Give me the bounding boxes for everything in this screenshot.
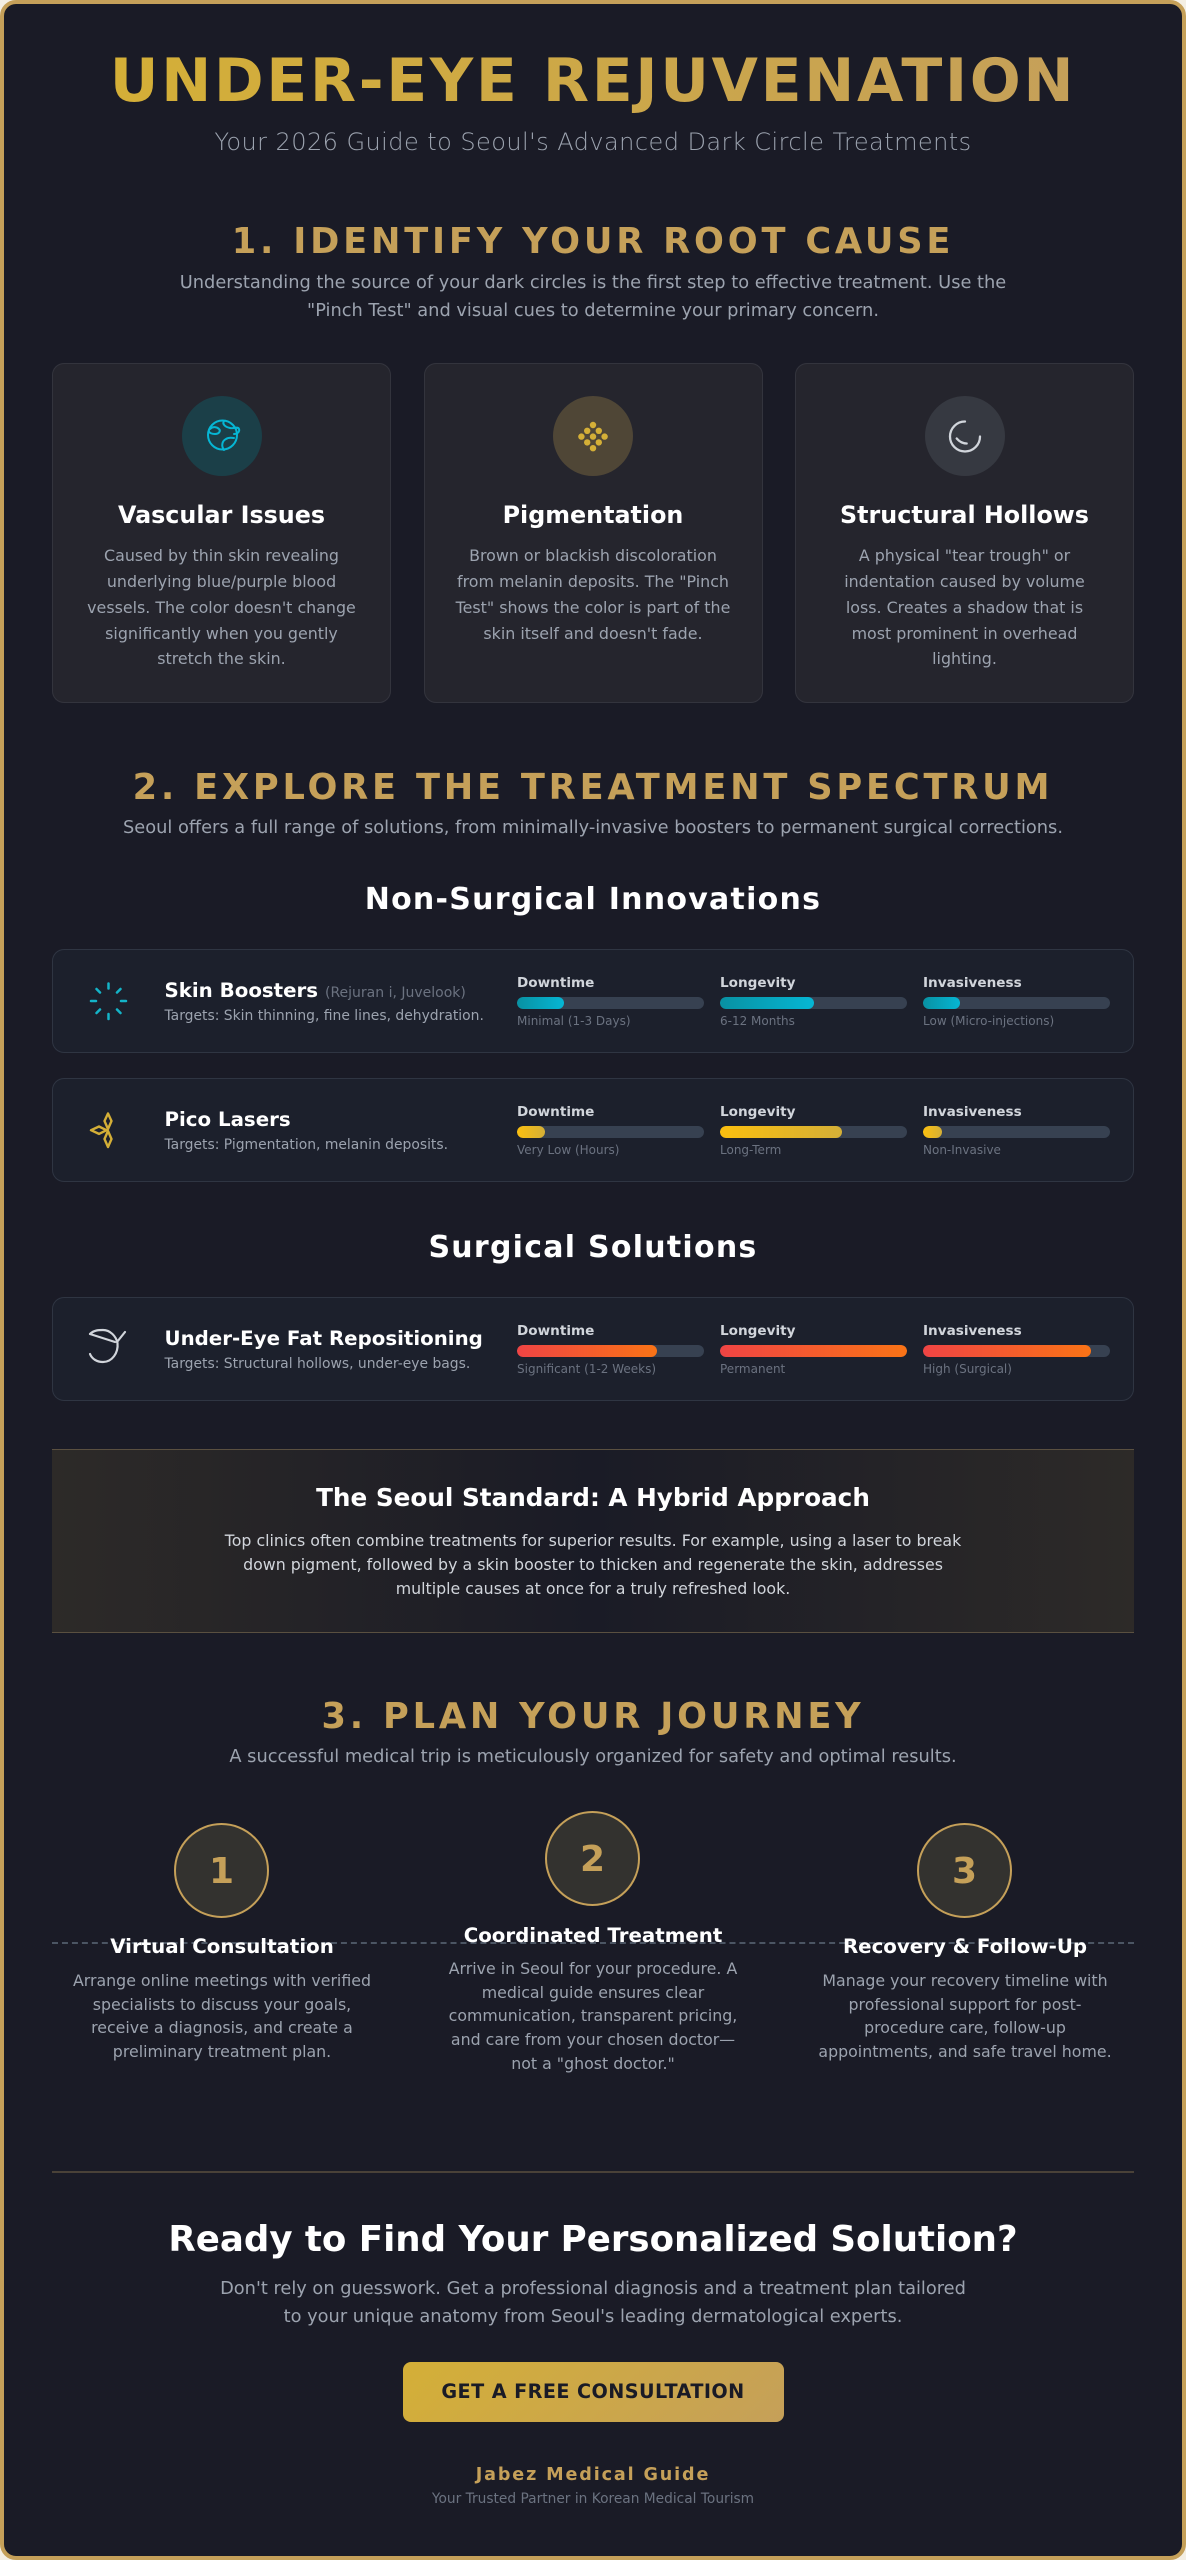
metric: invasiveness: Low (Micro-injections): [923, 1014, 1054, 1028]
card description: [456, 546, 730, 643]
section 2 heading: 2. EXPLORE THE TREATMENT SPECTRUM: [133, 767, 1053, 808]
card description: significantly when you gently: [105, 624, 338, 643]
callout text: down pigment, followed by a skin booster to thicken and regenerate the skin, addresses: [243, 1554, 943, 1574]
metric: downtime: Significant (1-2 Weeks): [517, 1362, 656, 1376]
card description: from melanin deposits. The "Pinch: [457, 572, 729, 591]
metric: downtime: Downtime: [517, 975, 594, 991]
metric: invasiveness: Invasiveness: [923, 1323, 1022, 1339]
step description: and care from your chosen doctor—: [451, 2030, 735, 2049]
section 1 intro text: Understanding the source of your dark circles is the first step to effective treatment. Use the: [180, 272, 1006, 293]
timeline dashed line: [52, 1942, 1134, 1944]
panel: structural hollows: [795, 363, 1134, 703]
metric: downtime: Minimal (1-3 Days): [517, 1014, 631, 1028]
metric: longevity: [720, 975, 907, 1028]
metric: invasiveness: Non-Invasive: [923, 1142, 1001, 1156]
icon: laser petals: [90, 1112, 113, 1148]
step title: Coordinated Treatment: [464, 1924, 722, 1947]
treatment targets: Targets: Skin thinning, fine lines, dehydration.: [164, 1008, 484, 1024]
metric: invasiveness: [923, 1104, 1110, 1156]
step number 1: 1: [209, 1851, 234, 1892]
treatment targets: Targets: Pigmentation, melanin deposits.: [164, 1136, 448, 1152]
step description: procedure care, follow-up: [864, 2018, 1066, 2037]
callout text: multiple causes at once for a truly refreshed look.: [396, 1578, 790, 1598]
card description: stretch the skin.: [157, 649, 286, 668]
metric: longevity: Longevity: [720, 1323, 796, 1339]
treatment name: Under-Eye Fat Repositioning: [164, 1327, 483, 1350]
step description: [448, 1959, 738, 2073]
metric: invasiveness: Invasiveness: [923, 975, 1022, 991]
section 3 heading: 3. PLAN YOUR JOURNEY: [322, 1696, 864, 1737]
treatment name: Skin Boosters (Rejuran i, Juvelook): [164, 979, 466, 1002]
card title: Vascular Issues: [118, 501, 325, 529]
cta text: [220, 2278, 966, 2327]
card description: [844, 546, 1085, 668]
metric: longevity: Long-Term: [720, 1142, 781, 1156]
panel: pico lasers: [52, 1078, 1134, 1182]
step title: Recovery & Follow-Up: [843, 1935, 1087, 1958]
step description: receive a diagnosis, and create a: [91, 2018, 353, 2037]
card description: indentation caused by volume: [844, 572, 1085, 591]
header: [110, 46, 1076, 156]
step number 3: [917, 1823, 1012, 1918]
panel: fat repositioning: [52, 1297, 1134, 1401]
metric: longevity: 6-12 Months: [720, 1014, 795, 1028]
metric: invasiveness: [923, 1323, 1110, 1376]
step description: Arrive in Seoul for your procedure. A: [449, 1959, 737, 1978]
callout title: The Seoul Standard: A Hybrid Approach: [316, 1483, 870, 1512]
section 3 intro text: A successful medical trip is meticulously organized for safety and optimal results.: [229, 1746, 957, 1767]
card description: Caused by thin skin revealing: [104, 546, 339, 565]
metric: longevity: Permanent: [720, 1362, 785, 1376]
card description: [87, 546, 356, 668]
card description: underlying blue/purple blood: [107, 572, 336, 591]
icon: surgical eye: [88, 1328, 126, 1364]
card title: Structural Hollows: [840, 501, 1089, 529]
panel: pigmentation: [424, 363, 762, 703]
step description: not a "ghost doctor.": [511, 2054, 675, 2073]
step description: specialists to discuss your goals,: [93, 1995, 351, 2014]
step description: [73, 1971, 371, 2061]
cta button: GET A FREE CONSULTATION: [441, 2380, 745, 2403]
section 1 intro text: [180, 272, 1006, 321]
metric: invasiveness: [923, 975, 1110, 1028]
step description: preliminary treatment plan.: [113, 2042, 331, 2061]
cta text: to your unique anatomy from Seoul's leading dermatological experts.: [284, 2306, 902, 2327]
cta heading: Ready to Find Your Personalized Solution?: [168, 2219, 1018, 2260]
panel: skin boosters: [52, 949, 1134, 1053]
metric: downtime: Very Low (Hours): [517, 1142, 619, 1156]
brand name: Jabez Medical Guide: [476, 2465, 710, 2485]
step description: medical guide ensures clear: [482, 1983, 704, 2002]
step description: professional support for post-: [849, 1995, 1081, 2014]
cta text: Don't rely on guesswork. Get a professional diagnosis and a treatment plan tailored: [220, 2278, 966, 2299]
step description: Arrange online meetings with verified: [73, 1971, 371, 1990]
step 2: [448, 1811, 738, 2073]
card description: skin itself and doesn't fade.: [483, 624, 703, 643]
icon: vascular globe: [182, 396, 262, 476]
step number 2: 2: [580, 1839, 605, 1880]
step description: communication, transparent pricing,: [449, 2006, 737, 2025]
card description: vessels. The color doesn't change: [87, 598, 356, 617]
metric: longevity: [720, 1104, 907, 1156]
step description: [818, 1971, 1112, 2061]
callout: the seoul standard: [52, 1449, 1134, 1633]
footer: [432, 2465, 754, 2507]
step description: appointments, and safe travel home.: [818, 2042, 1112, 2061]
section 1 intro text: "Pinch Test" and visual cues to determine your primary concern.: [307, 300, 879, 321]
step number 1: [174, 1823, 269, 1918]
metric: longevity: [720, 1323, 907, 1376]
treatment name: Pico Lasers: [164, 1108, 291, 1130]
card description: Test" shows the color is part of the: [456, 598, 730, 617]
section 1 heading: 1. IDENTIFY YOUR ROOT CAUSE: [232, 221, 954, 262]
card description: Brown or blackish discoloration: [469, 546, 717, 565]
metric: longevity: Longevity: [720, 975, 796, 991]
title: UNDER-EYE REJUVENATION: [110, 46, 1076, 116]
step description: Manage your recovery timeline with: [822, 1971, 1108, 1990]
surgical subheading: Surgical Solutions: [428, 1230, 758, 1265]
card description: A physical "tear trough" or: [859, 546, 1070, 565]
cta button: [402, 2362, 784, 2422]
step number 2: [545, 1811, 640, 1906]
subtitle: Your 2026 Guide to Seoul's Advanced Dark Circle Treatments: [214, 128, 972, 156]
metric: invasiveness: High (Surgical): [923, 1362, 1012, 1376]
callout text: [224, 1530, 962, 1598]
icon: pigment dots: [553, 396, 633, 476]
metric: invasiveness: Invasiveness: [923, 1104, 1022, 1120]
metric: downtime: Downtime: [517, 1104, 594, 1120]
icon: skin booster burst: [90, 982, 128, 1020]
treatment targets: Targets: Structural hollows, under-eye bags.: [164, 1356, 470, 1372]
icon: hollow arc: [924, 396, 1004, 476]
metric: downtime: [517, 1323, 704, 1376]
metric: downtime: Downtime: [517, 1323, 594, 1339]
call to action: [168, 2219, 1018, 2422]
step title: Virtual Consultation: [110, 1935, 334, 1958]
metric: downtime: [517, 1104, 704, 1156]
step 3: [818, 1823, 1112, 2061]
divider: [52, 2171, 1134, 2173]
card description: lighting.: [932, 649, 997, 668]
step number 3: 3: [952, 1851, 977, 1892]
card title: Pigmentation: [503, 501, 683, 529]
metric: downtime: [517, 975, 704, 1028]
non-surgical subheading: Non-Surgical Innovations: [365, 882, 821, 917]
callout text: Top clinics often combine treatments for superior results. For example, using a laser to break: [225, 1530, 961, 1550]
card description: loss. Creates a shadow that is: [846, 598, 1083, 617]
card description: most prominent in overhead: [852, 624, 1077, 643]
step 1: [73, 1823, 371, 2061]
panel: vascular issues: [52, 363, 391, 703]
section 2 intro text: Seoul offers a full range of solutions, from minimally-invasive boosters to permanent surgical corrections.: [123, 817, 1063, 838]
brand tagline: Your Trusted Partner in Korean Medical Tourism: [432, 2491, 754, 2507]
metric: longevity: Longevity: [720, 1104, 796, 1120]
